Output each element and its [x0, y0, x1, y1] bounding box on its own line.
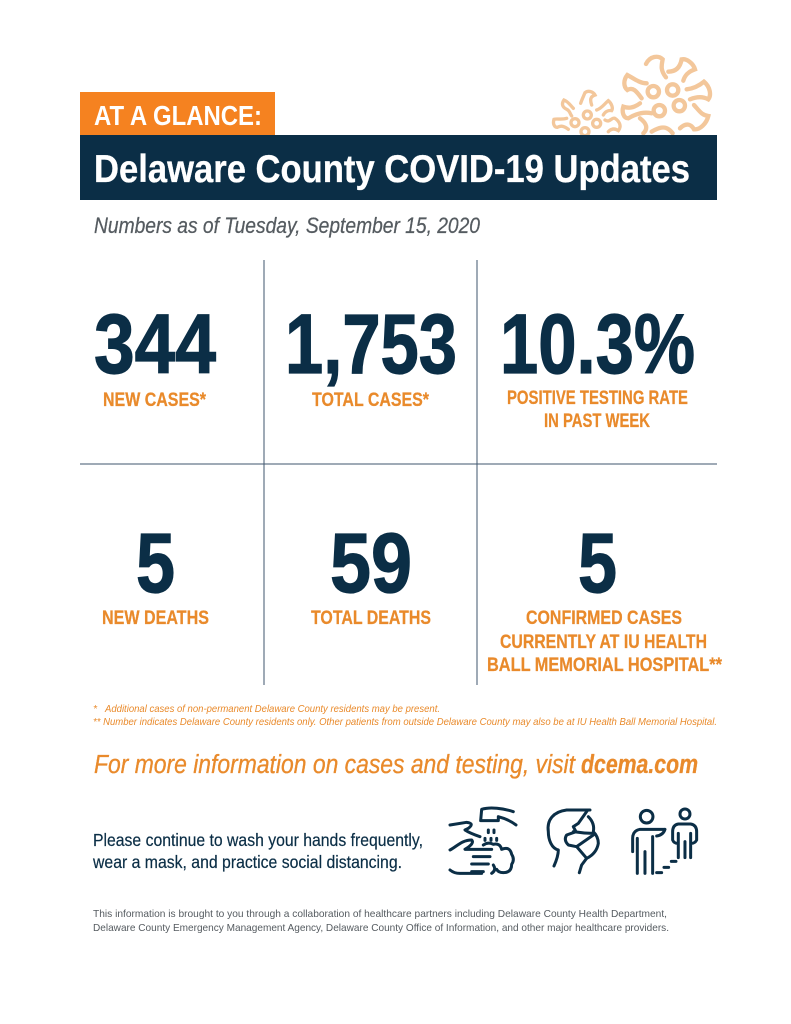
- stat: total deaths: TOTAL DEATHS: [311, 607, 431, 629]
- collaboration credit: [93, 908, 669, 934]
- stat: positive testing rate: [500, 297, 695, 432]
- call to action: dcema.com: [581, 751, 698, 779]
- icon: hand washing: [450, 808, 516, 873]
- stat: confirmed hospital cases: 5: [578, 516, 617, 610]
- stat: positive testing rate: 10.3%: [500, 297, 695, 391]
- stat: total cases: TOTAL CASES*: [312, 389, 429, 411]
- call to action: For more information on cases and testing, visit: [94, 751, 576, 779]
- heading tag: at a glance: AT A GLANCE:: [94, 100, 262, 131]
- footnotes: [93, 703, 717, 728]
- stat: total cases: 1,753: [285, 297, 457, 391]
- stat: new cases: NEW CASES*: [103, 389, 206, 411]
- stat: total deaths: 59: [330, 516, 412, 610]
- stat: total cases: [285, 297, 457, 411]
- icon: head with mask: [548, 810, 598, 873]
- stat: confirmed hospital cases: BALL MEMORIAL HOSPITAL**: [487, 654, 722, 676]
- stat: new deaths: 5: [136, 516, 175, 610]
- stat: confirmed hospital cases: [487, 516, 722, 676]
- title banner: Delaware County COVID-19 Updates: [94, 148, 690, 191]
- safety reminder text: wear a mask, and practice social distancing.: [92, 852, 402, 872]
- safety reminder text: Please continue to wash your hands frequently,: [93, 830, 423, 850]
- title banner: [80, 135, 717, 200]
- footnotes: ** Number indicates Delaware County residents only. Other patients from outside Delaware County may also be at IU Health Ball Memorial Hospital.: [93, 716, 717, 728]
- footnotes: Additional cases of non-permanent Delaware County residents may be present.: [104, 703, 440, 715]
- stat: new cases: 344: [94, 297, 216, 391]
- collaboration credit: Delaware County Emergency Management Agency, Delaware County Office of Information, and other major healthcare providers.: [93, 922, 669, 934]
- collaboration credit: This information is brought to you through a collaboration of healthcare partners including Delaware County Health Department,: [93, 908, 667, 920]
- stat: confirmed hospital cases: CONFIRMED CASES: [526, 607, 682, 629]
- stat: total deaths: [311, 516, 431, 629]
- stat: new deaths: NEW DEATHS: [102, 607, 209, 629]
- icon: coronavirus decoration: [553, 57, 710, 136]
- date subtitle: Numbers as of Tuesday, September 15, 2020: [94, 213, 481, 238]
- stat: new deaths: [102, 516, 209, 629]
- heading tag: at a glance: [80, 92, 275, 135]
- icon: social distancing: [633, 809, 697, 873]
- stat: confirmed hospital cases: CURRENTLY AT IU HEALTH: [500, 631, 707, 653]
- stat: positive testing rate: IN PAST WEEK: [544, 410, 650, 432]
- safety reminder text: [92, 830, 423, 872]
- footnotes: *: [93, 703, 98, 715]
- stat: positive testing rate: POSITIVE TESTING RATE: [507, 387, 688, 409]
